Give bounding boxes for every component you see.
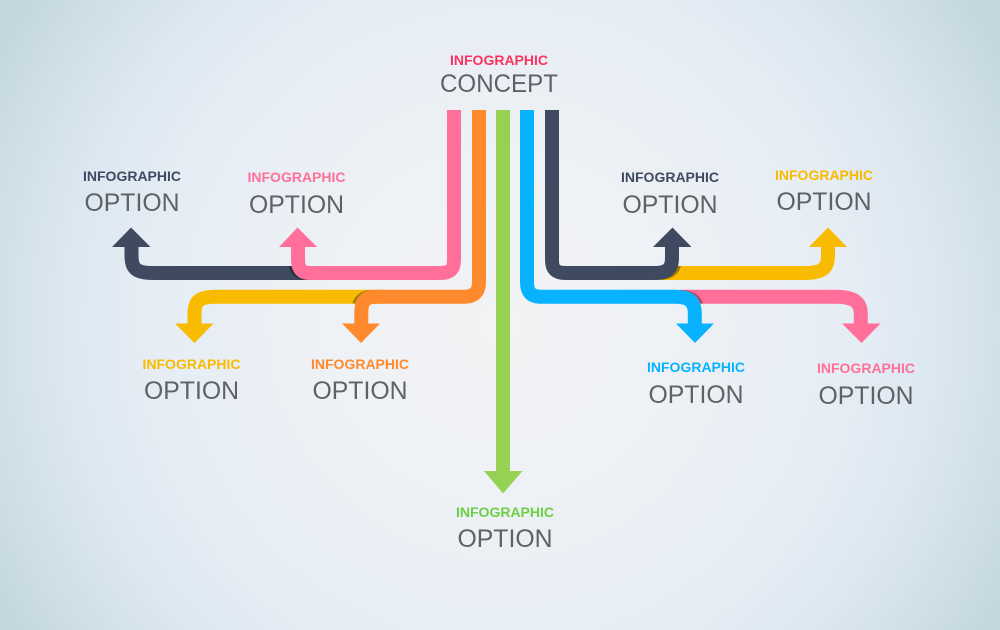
label: navy right: INFOGRAPHIC (621, 170, 719, 186)
label: navy left: INFOGRAPHIC (83, 169, 181, 185)
title: CONCEPT (440, 70, 558, 98)
infographic diagram (84, 56, 914, 547)
label: yellow right: OPTION (776, 189, 872, 216)
arrow: blue (527, 110, 714, 343)
label: yellow right (775, 168, 873, 216)
label: orange: OPTION (312, 378, 408, 405)
label: blue: OPTION (648, 382, 744, 409)
label: green (456, 505, 554, 553)
label: orange: INFOGRAPHIC (311, 357, 409, 373)
label: pink right: INFOGRAPHIC (817, 361, 915, 377)
arrow: green (484, 110, 522, 494)
label: pink left: INFOGRAPHIC (248, 170, 346, 186)
label: navy left: OPTION (84, 190, 180, 217)
label: blue (647, 360, 745, 409)
arrow: pink left with shadow on navy (279, 110, 454, 273)
label: pink right (817, 361, 915, 410)
title: INFOGRAPHIC (450, 53, 548, 69)
arrow: orange (342, 110, 479, 343)
arrow: navy left (112, 228, 325, 273)
label: green: OPTION (457, 526, 553, 553)
label: navy right: OPTION (622, 192, 718, 219)
arrow: yellow right (660, 228, 847, 273)
title (440, 53, 558, 98)
arrow: navy right (552, 110, 692, 273)
arrow: yellow left (175, 297, 385, 343)
label: blue: INFOGRAPHIC (647, 360, 745, 376)
label: green: INFOGRAPHIC (456, 505, 554, 521)
label: navy left (83, 169, 181, 217)
label: pink left: OPTION (249, 192, 344, 219)
label: orange (311, 357, 409, 405)
label: navy right (621, 170, 719, 219)
label: yellow left (142, 357, 240, 405)
label: pink right: OPTION (818, 383, 914, 410)
label: yellow left: INFOGRAPHIC (142, 357, 240, 373)
arrow: pink right (680, 297, 880, 343)
label: pink left (248, 170, 346, 219)
label: yellow right: INFOGRAPHIC (775, 168, 873, 184)
label: yellow left: OPTION (144, 378, 239, 405)
